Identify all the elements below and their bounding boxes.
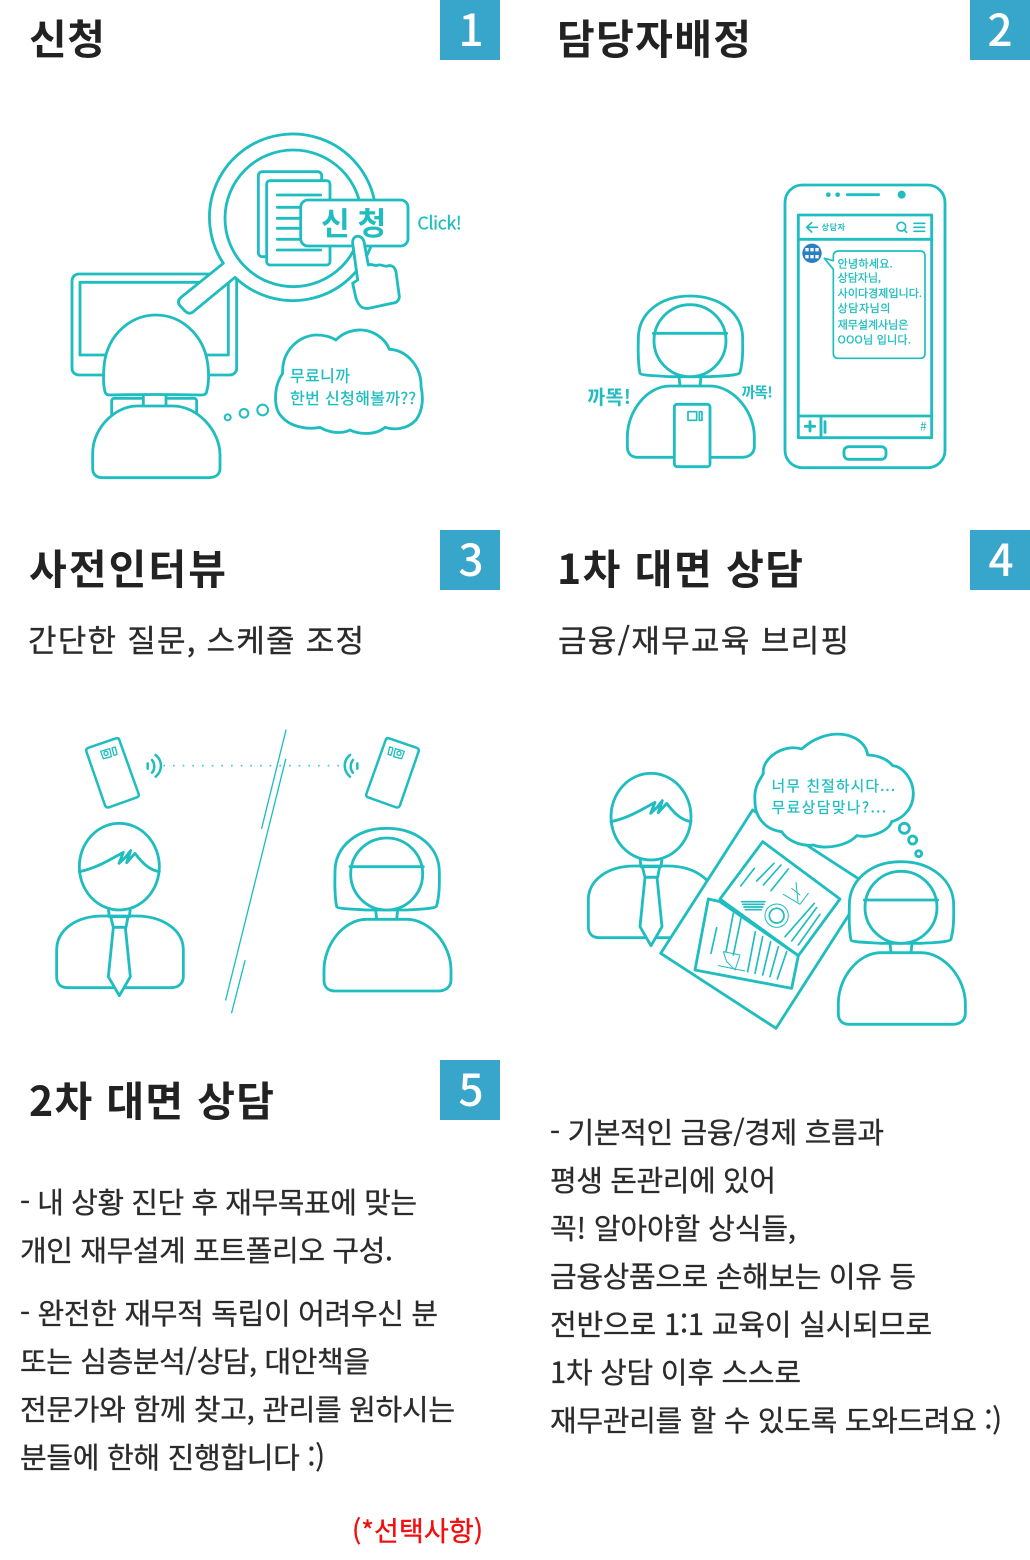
note: optional: (*선택사항) [352,1510,483,1549]
number badge 2 [970,0,1030,60]
panel: step 4 first meeting [550,525,1030,1440]
thought bubble [755,734,913,847]
icon: right phone [345,738,419,807]
panel: step 5 second meeting [20,1055,500,1549]
label: 까똑 large: 까똑! [587,382,631,410]
icon: glass divider [226,730,286,1013]
label: Click!: Click! [417,209,462,235]
thought bubble: 한번 신청해볼까?? [290,385,416,409]
icon: man consultant [57,823,183,996]
thought bubble dots [225,405,268,420]
icon: woman client [838,862,965,1024]
number badge 4: 4 [988,525,1014,589]
illustration: phone interview [57,730,451,1013]
thought bubble [276,330,422,433]
icon: documents [258,172,330,265]
illustration: person applying at monitor [72,134,462,478]
icon: lower report [695,899,798,988]
icon: woman client [324,828,451,991]
chat bubble: 상담자님, [838,270,881,286]
illustration: face-to-face briefing [588,734,965,1028]
heading: 사전인터뷰: 사전인터뷰 [29,536,226,596]
chat bubble: 상담자님의 [838,300,890,316]
text block: step 5 description: 전문가와 함께 찾고, 관리를 원하시는 [20,1387,455,1429]
chat bubble: 재무설계사님은 [838,316,908,332]
illustration: chat notification [587,185,945,468]
icon: man consultant [588,773,715,946]
avatar [802,244,822,263]
chat bubble: 사이다경제입니다. [838,285,922,301]
icon: smartphone [785,185,945,468]
text block: step 5 description: 분들에 한해 진행합니다 :) [20,1435,325,1477]
heading: 신청: 신청 [29,6,105,66]
number badge 5 [440,1055,500,1120]
icon: magnifier lens [225,150,362,287]
heading: 2차 대면 상담: 2차 대면 상담 [29,1068,274,1128]
chat bubble: OOO님 입니다. [838,332,911,348]
panel: step 3 pre-interview [28,525,500,1013]
text block: step 5 description: - 완전한 재무적 독립이 어려우신 분 [20,1291,438,1333]
text block: step 5 description [20,1180,455,1477]
number badge 5: 5 [458,1055,484,1119]
icon: magnifier [178,134,376,313]
text block: step 4 description: 1차 상담 이후 스스로 [550,1350,801,1392]
number badge 4 [970,525,1030,590]
icon: desk sheet [661,810,868,1028]
text block: step 4 description: 재무관리를 할 수 있도록 도와드려요 :) [550,1398,1002,1440]
subtitle: 간단한 질문, 스케줄 조정 [28,616,364,661]
heading: 담당자배정: 담당자배정 [557,6,751,66]
text block: step 4 description [550,1110,1002,1440]
thought bubble: 무료상담맞나?... [772,797,886,818]
thought bubble: 너무 친절하시다... [772,775,895,796]
button: 신청 [301,200,408,246]
icon: woman with phone [627,296,754,467]
icon: upper report [720,842,840,956]
thought bubble dots [899,823,922,857]
icon: monitor [72,274,237,375]
text block: step 5 description: 또는 심층분석/상담, 대안책을 [20,1339,370,1381]
text block: step 5 description: - 내 상황 진단 후 재무목표에 맞는 [20,1180,417,1222]
icon: left phone [86,738,161,807]
text block: step 4 description: - 기본적인 금융/경제 흐름과 [550,1110,884,1152]
person: back of head [93,315,220,478]
number badge 1 [440,0,500,60]
chat bubble: 안녕하세요. [838,256,893,272]
chat bubble [824,251,925,358]
number badge 3: 3 [458,525,484,589]
heading: 1차 대면 상담: 1차 대면 상담 [557,536,803,596]
text block: step 4 description: 평생 돈관리에 있어 [550,1158,776,1200]
text block: step 4 description: 꼭! 알아야할 상식들, [550,1206,796,1248]
text block: step 4 description: 전반으로 1:1 교육이 실시되므로 [550,1302,932,1344]
label: 까똑 small: 까똑! [742,381,773,402]
subtitle: 금융/재무교육 브리핑 [558,616,849,661]
text block: step 5 description: 개인 재무설계 포트폴리오 구성. [20,1228,393,1270]
panel: step 2 counselor assignment [557,0,1030,468]
icon: smartphone: # [920,418,927,435]
panel: step 1 application [29,0,500,478]
dotted signal line [163,763,342,768]
number badge 3 [440,525,500,590]
icon: smartphone: 상담자 [822,222,846,233]
text block: step 4 description: 금융상품으로 손해보는 이유 등 [550,1254,916,1296]
thought bubble: 무료니까 [290,363,350,387]
button: 신청: 신 청 [321,200,386,245]
icon: pointing hand [353,236,399,308]
